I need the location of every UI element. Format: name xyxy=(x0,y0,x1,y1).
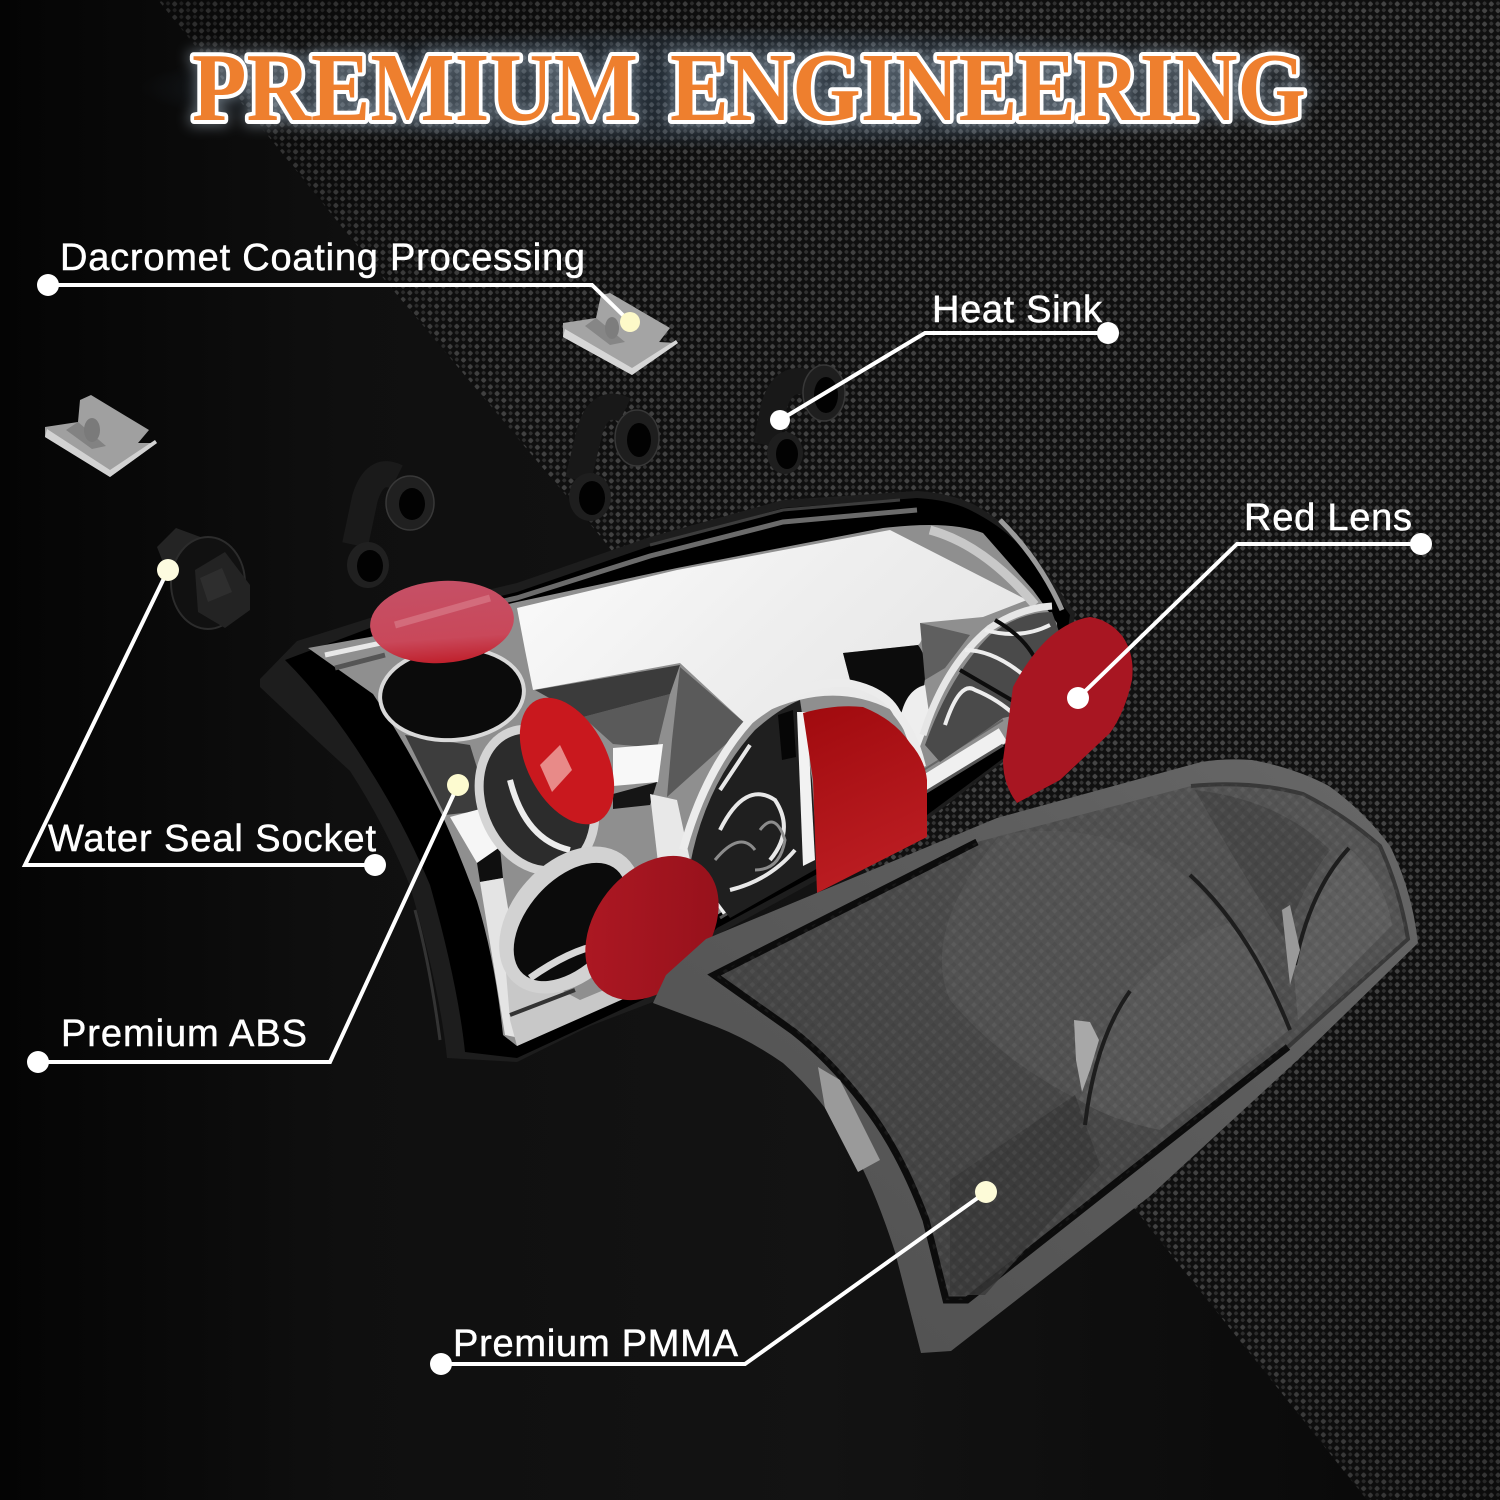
housing: lower round opening xyxy=(471,819,669,1021)
housing: left chrome panels xyxy=(405,735,490,815)
red lens: lower disc xyxy=(558,830,746,1026)
callout: Dacromet Coating Processing xyxy=(37,237,640,332)
housing: centre bulb cavity xyxy=(683,683,922,918)
tail light housing xyxy=(260,491,1075,1062)
title glow xyxy=(192,34,1306,141)
housing: black inner band xyxy=(285,498,1070,1058)
smoked outer lens xyxy=(653,759,1418,1353)
title orange fill: PREMIUM xyxy=(192,34,638,141)
callout: Water Seal Socket xyxy=(25,559,386,876)
callout: Premium PMMA xyxy=(430,1181,997,1375)
callout: Dacromet Coating Processing: Dacromet Coating Processing xyxy=(60,237,585,279)
grommet: top middle xyxy=(569,407,659,521)
housing: gray wedge below dome xyxy=(667,667,747,797)
callout: Premium ABS xyxy=(27,774,469,1073)
housing: outer flange xyxy=(260,491,1075,1062)
red lens: right half dome xyxy=(1003,617,1133,803)
grommet: left xyxy=(347,474,434,588)
outer lens: domes xyxy=(942,831,1227,1100)
housing: dark gap right of dome xyxy=(843,645,926,720)
outer lens: ridges xyxy=(1085,848,1349,1125)
outer lens: rim xyxy=(653,759,1418,1353)
callout: Water Seal Socket: Water Seal Socket xyxy=(48,818,376,860)
housing: chrome base xyxy=(308,525,1060,1046)
housing: rim highlights xyxy=(372,500,1062,1040)
callout: Premium PMMA: Premium PMMA xyxy=(453,1323,739,1365)
red lens: flat disc top xyxy=(367,576,517,668)
title glow: PREMIUM xyxy=(192,34,638,141)
outer lens: highlights xyxy=(1074,1020,1099,1092)
title orange fill: ENGINEERING xyxy=(670,34,1306,141)
housing: upper round opening xyxy=(375,641,529,747)
title white outline xyxy=(192,34,1306,141)
housing: upper right chrome tube xyxy=(930,530,1035,605)
title white outline: ENGINEERING xyxy=(670,34,1306,141)
callout: Red Lens: Red Lens xyxy=(1244,497,1412,539)
outer lens: inner panel xyxy=(714,784,1408,1300)
housing: white domes xyxy=(517,530,1027,725)
outer lens: gasket xyxy=(714,842,1288,1300)
housing: bottom left chrome xyxy=(505,960,655,1046)
clip: left fastener xyxy=(45,395,157,477)
title orange fill xyxy=(192,34,1306,141)
outer lens: lower panel xyxy=(950,1095,1100,1295)
housing: upper left rim stripes xyxy=(325,640,395,668)
title glow: ENGINEERING xyxy=(670,34,1306,141)
grommet: top right xyxy=(766,365,845,474)
outer lens: carbon show-through xyxy=(714,784,1408,1300)
callout: Premium ABS: Premium ABS xyxy=(61,1013,307,1055)
callout: Heat Sink: Heat Sink xyxy=(932,289,1103,331)
clip: upper right fastener xyxy=(563,293,678,375)
housing: right bulb cavity xyxy=(923,606,1062,762)
housing: socket ring xyxy=(459,712,615,888)
outer lens: upper right gasket xyxy=(1191,784,1408,1047)
callout: Red Lens xyxy=(1067,497,1432,709)
title xyxy=(192,34,1306,141)
callout: Heat Sink xyxy=(770,289,1119,430)
housing: lower chrome strips xyxy=(720,720,1003,918)
title white outline: PREMIUM xyxy=(192,34,638,141)
red lens: small oval xyxy=(500,682,634,840)
water seal socket plug xyxy=(157,528,250,629)
red lens: centre half dome xyxy=(803,706,927,893)
